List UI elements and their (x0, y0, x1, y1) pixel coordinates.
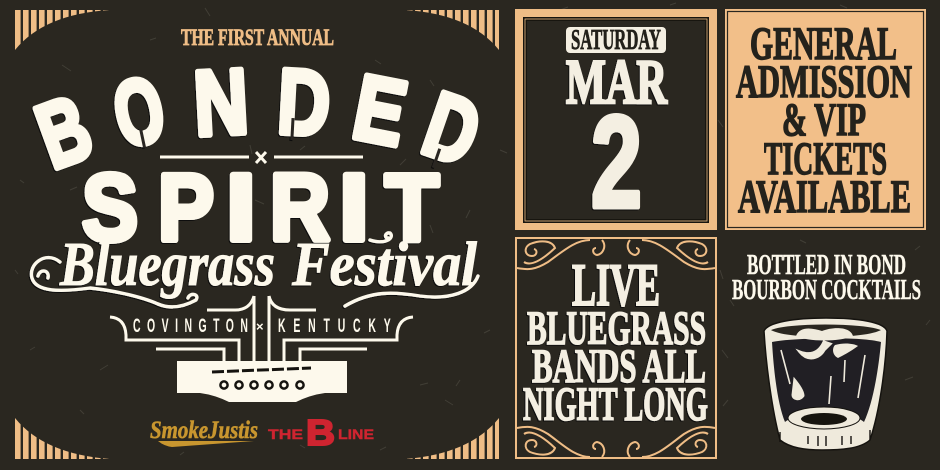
stencil gaps (139, 118, 441, 168)
title: spirit: S (82, 155, 138, 261)
saturday pill: SATURDAY (571, 25, 661, 56)
panel: live bands (516, 238, 716, 458)
title: bonded: D (275, 51, 333, 155)
title: spirit: I (339, 155, 369, 261)
location: covington kentucky: KENTUCKY (278, 316, 391, 337)
panel: live bands: BLUEGRASS (527, 302, 706, 355)
title: bonded: D (412, 73, 492, 186)
title: spirit: T (385, 155, 439, 261)
title: bluegrass festival script: Bluegrass (59, 231, 275, 299)
divider with x (160, 152, 363, 163)
title: bonded (24, 51, 492, 189)
title: bonded: E (346, 56, 414, 166)
location: covington kentucky: × (256, 319, 264, 334)
icon: guitar bridge and strings (110, 296, 413, 402)
logo: the b line: THE (268, 426, 303, 442)
panel: live bands: LIVE (572, 252, 660, 318)
title: spirit (82, 155, 439, 261)
heading: the first annual: THE FIRST ANNUAL (181, 25, 334, 50)
logo: the b line (268, 412, 374, 453)
location: covington kentucky: COVINGTON (133, 316, 248, 337)
panel: live bands: NIGHT LONG (523, 378, 708, 431)
title: spirit: R (270, 155, 330, 261)
day number: 2 (591, 88, 642, 235)
panel: live bands: BANDS ALL (532, 340, 706, 393)
title: bonded: B (24, 76, 104, 189)
text: bottled in bond (732, 249, 921, 306)
panel: date (515, 9, 717, 235)
saturday pill (566, 25, 666, 56)
location: covington kentucky (133, 316, 391, 337)
ornaments (517, 240, 715, 457)
corner stripes (15, 10, 499, 459)
logo: smoke justis: SmokeJustis (150, 417, 258, 444)
logo: the b line: LINE (338, 426, 374, 442)
logo: the b line: B (306, 412, 335, 453)
title: bonded: N (191, 51, 251, 155)
title: bluegrass festival script (31, 231, 478, 307)
panel: tickets: & VIP (782, 94, 866, 146)
title: spirit: I (226, 155, 256, 261)
panel: tickets (725, 9, 926, 230)
title: bonded: O (105, 58, 173, 167)
month: MAR (566, 46, 668, 117)
icon: whiskey glass (764, 318, 887, 450)
title: bluegrass festival script: Festival (291, 231, 478, 299)
title: spirit: P (158, 155, 214, 261)
